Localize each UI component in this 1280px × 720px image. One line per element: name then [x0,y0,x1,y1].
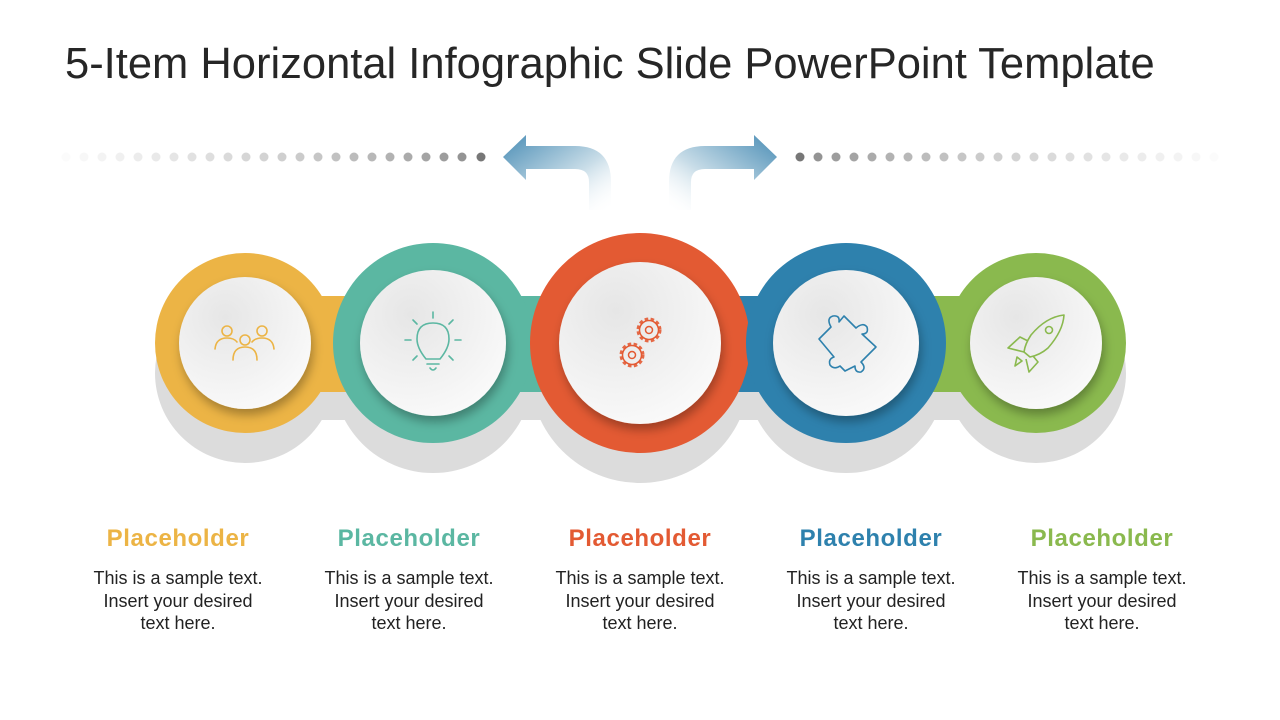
text: item 2: This is a sample text. [324,568,494,588]
dotted line right [796,152,1218,162]
text: item 5: This is a sample text. [1017,568,1187,588]
text: item 4: This is a sample text. [786,568,956,588]
arrow right [669,135,777,210]
text: item 2: text here. [371,613,447,633]
text: item 3: text here. [602,613,678,633]
text: item 4 [786,525,956,633]
text: item 1: Placeholder [107,525,249,552]
title: 5-Item Horizontal Infographic Slide PowerPoint Template [65,40,1155,88]
arrow left [503,135,611,210]
text: item 1: text here. [140,613,216,633]
connectors [245,296,1036,392]
text: item 2 [324,525,494,633]
text: item 1: This is a sample text. [93,568,263,588]
item 4: blue circle with puzzle icon [746,243,946,443]
text: item 5: Insert your desired [1027,590,1177,610]
dotted line left [62,152,486,162]
item 2: teal circle with bulb icon [333,243,533,443]
text: item 3 [555,525,725,633]
item 3: red circle with gears icon [530,233,750,453]
text: item 4: text here. [833,613,909,633]
text: item 3: This is a sample text. [555,568,725,588]
text: item 5: text here. [1064,613,1140,633]
text: item 3: Insert your desired [565,590,715,610]
item 1: yellow circle with people icon [155,253,335,433]
text: item 1 [93,525,263,633]
item 5: green circle with rocket icon [946,253,1126,433]
shadow band [155,263,1126,483]
text: item 5: Placeholder [1031,525,1173,552]
text: item 3: Placeholder [569,525,711,552]
text: item 2: Placeholder [338,525,480,552]
text: item 4: Insert your desired [796,590,946,610]
text: item 2: Insert your desired [334,590,484,610]
text: item 4: Placeholder [800,525,942,552]
text: item 5 [1017,525,1187,633]
text: item 1: Insert your desired [103,590,253,610]
